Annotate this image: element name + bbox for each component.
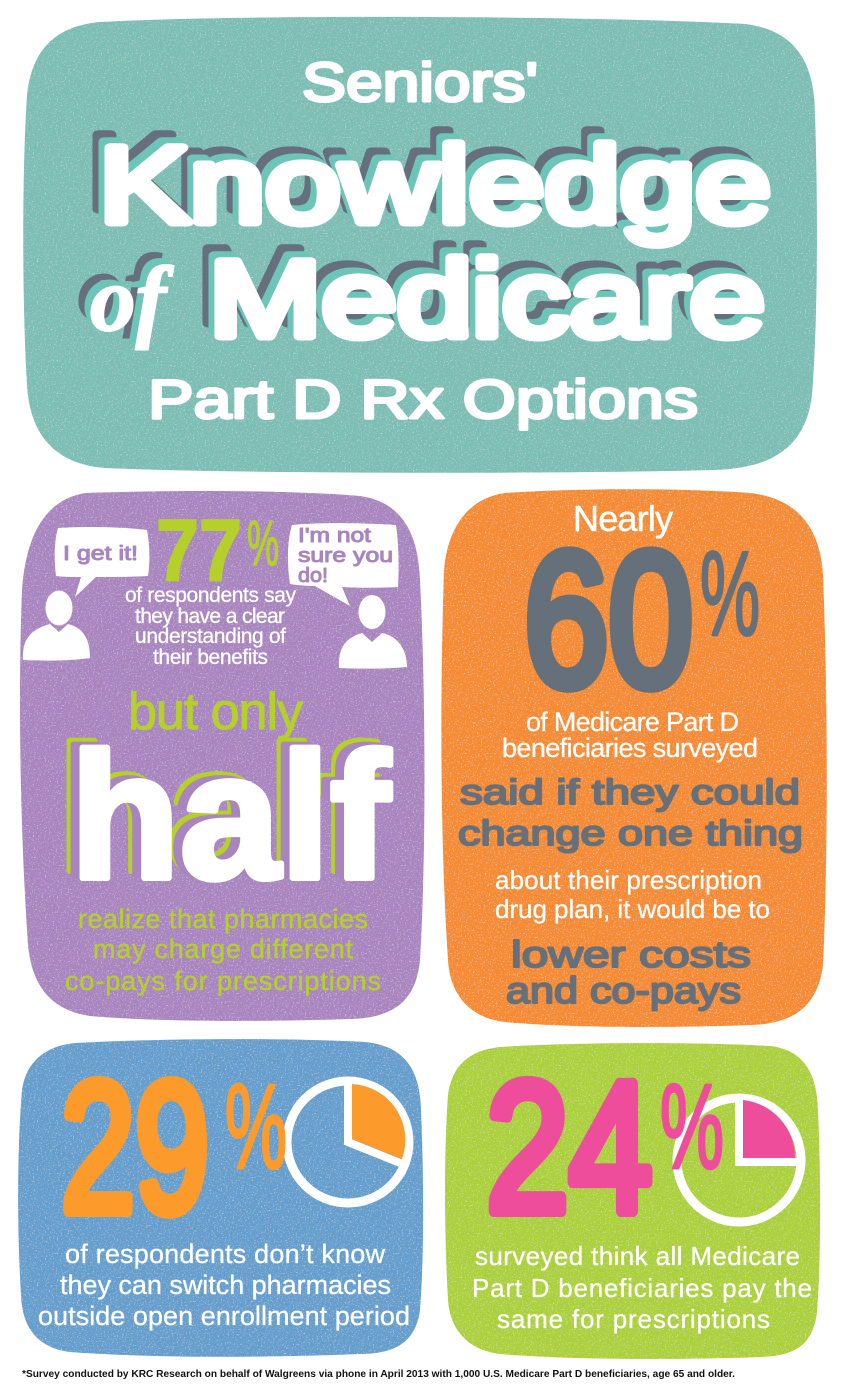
panel: 29 percent	[18, 1039, 423, 1357]
text: all pay the same: Part D beneficiaries pay the	[472, 1273, 812, 1303]
text: all pay the same: same for prescriptions	[497, 1304, 770, 1334]
footnote: *Survey conducted by KRC Research on behalf of Walgreens via phone in April 2013 with 1,000 U.S. Medicare Part D beneficiaries, age 65 and older.	[22, 1369, 735, 1380]
text: don't know they can switch	[38, 1239, 410, 1331]
text: all pay the same	[472, 1241, 812, 1334]
heading: Part D Rx Options: Part D Rx Options	[148, 368, 698, 430]
text: said if they could change one thing	[458, 773, 803, 853]
text: about their prescription plan: drug plan, it would be to	[495, 894, 770, 924]
stat: 29%: 29	[61, 1045, 209, 1251]
text: about their prescription plan	[495, 865, 770, 924]
pie chart: 24 percent	[677, 1098, 801, 1222]
icon: person with speech bubble left: I get it!	[63, 543, 138, 565]
panel: 77 percent understanding	[20, 491, 424, 1021]
text: pharmacies co-pays: may charge different	[93, 934, 353, 964]
text: respondents understanding: they have a clear	[135, 605, 285, 628]
icon: person with speech bubble right: sure you	[298, 545, 393, 567]
panel: title	[23, 17, 817, 473]
stat: 24%: %	[660, 1060, 724, 1194]
text: lower costs and co-pays	[506, 934, 751, 1011]
text: pharmacies co-pays: realize that pharmacies	[78, 904, 368, 934]
icon: person with speech bubble right	[288, 523, 407, 669]
heading: Seniors': Seniors'	[302, 51, 538, 113]
stat: 77%: %	[247, 507, 279, 579]
text: all pay the same: surveyed think all Medicare	[475, 1241, 800, 1271]
text: of Medicare Part D beneficiaries	[502, 707, 758, 763]
text: said if they could change one thing: change one thing	[458, 814, 803, 853]
text: don't know they can switch: they can switch pharmacies	[60, 1270, 391, 1300]
heading: Knowledge: Knowledge	[87, 111, 759, 232]
stat: 60%: 60	[524, 514, 693, 726]
text: lower costs and co-pays: and co-pays	[506, 970, 741, 1011]
stat: 24%: 24	[486, 1045, 652, 1251]
heading: Medicare: Medicare	[203, 232, 759, 353]
heading: Medicare: Medicare	[197, 225, 753, 346]
text: respondents understanding: their benefits	[153, 646, 268, 669]
stat: 29%: %	[225, 1060, 287, 1194]
heading: half: half	[70, 716, 391, 917]
text: respondents understanding	[125, 584, 296, 669]
text: about their prescription plan: about their prescription	[495, 865, 762, 895]
text: of Medicare Part D beneficiaries: of Medicare Part D	[526, 707, 739, 737]
pie chart: 29 percent	[287, 1081, 409, 1203]
text: lower costs and co-pays: lower costs	[511, 934, 751, 975]
text: but only: but only	[128, 683, 303, 741]
text: of Medicare Part D beneficiaries: beneficiaries surveyed	[502, 733, 758, 763]
heading: Medicare: Medicare	[209, 238, 765, 359]
text: said if they could change one thing: said if they could	[460, 773, 800, 812]
heading: Knowledge: Knowledge	[93, 118, 765, 239]
text: don't know they can switch: outside open enrollment period	[38, 1301, 410, 1331]
text: respondents understanding: of respondents say	[125, 584, 296, 607]
heading: of: of	[90, 248, 174, 350]
panel: nearly 60 percent	[441, 489, 827, 1027]
stat: 60%: %	[700, 527, 760, 661]
stat: 77%: 77	[156, 502, 242, 599]
panel: 24 percent	[445, 1043, 820, 1359]
heading: half: half	[57, 709, 378, 910]
heading: of: of	[84, 242, 168, 344]
heading: Knowledge: Knowledge	[99, 124, 771, 245]
text: respondents understanding: understanding of	[135, 625, 286, 648]
icon: person with speech bubble right: I'm not	[298, 525, 372, 547]
heading: of: of	[78, 236, 162, 338]
text: Nearly: Nearly	[573, 498, 673, 539]
icon: person with speech bubble left	[23, 527, 149, 661]
text: pharmacies co-pays	[65, 904, 381, 996]
heading: half: half	[61, 713, 382, 914]
text: don't know they can switch: of respondents don’t know	[65, 1239, 386, 1269]
icon: person with speech bubble right: do!	[298, 565, 328, 587]
text: pharmacies co-pays: co-pays for prescriptions	[65, 966, 381, 996]
